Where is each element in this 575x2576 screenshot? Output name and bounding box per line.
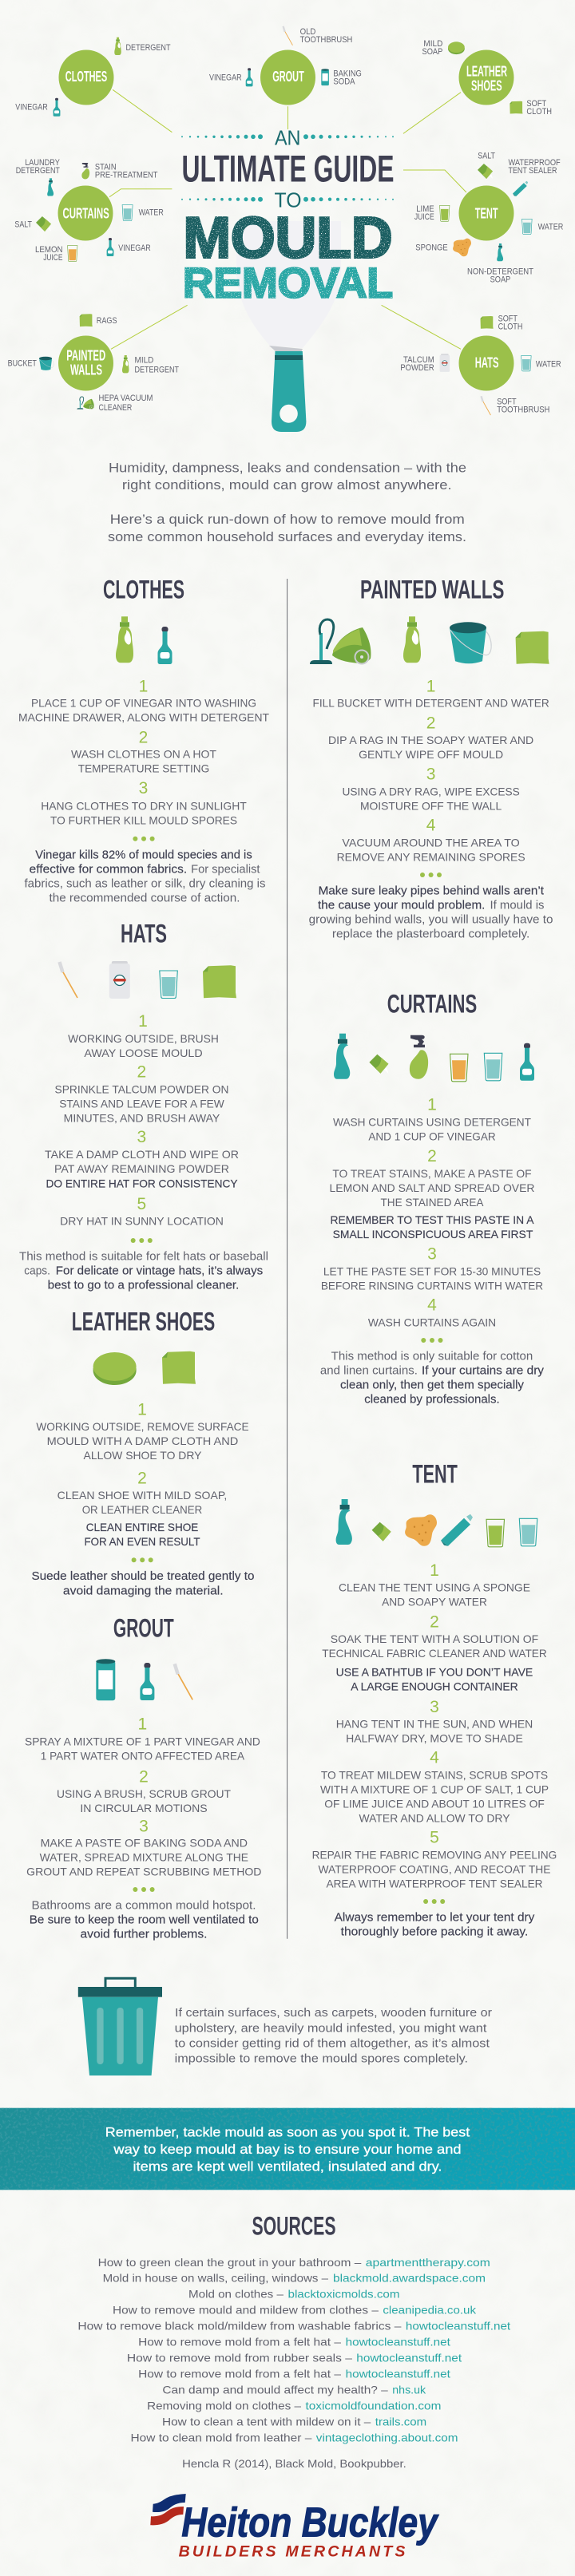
panel: painted walls: the cause your mould problem. (318, 900, 485, 912)
panel: tent: thoroughly before packing it away. (341, 1926, 528, 1939)
panel: clothes: TEMPERATURE SETTING (78, 762, 209, 775)
panel: grout: Bathrooms are a common mould hotspot. (32, 1900, 256, 1913)
panel: curtains: LET THE PASTE SET FOR 15-30 MINUTES (323, 1265, 541, 1278)
hub: curtains: LEMON (35, 245, 63, 255)
panel: tent: AND SOAPY WATER (382, 1596, 487, 1609)
panel: curtains: BEFORE RINSING CURTAINS WITH WATER (321, 1280, 543, 1292)
sources: howtocleanstuff.net (346, 2368, 450, 2380)
hub: leather shoes: SOAP (422, 47, 442, 57)
sources: howtocleanstuff.net (406, 2320, 510, 2333)
sources: howtocleanstuff.net (356, 2352, 462, 2364)
panel: clothes: 3 (139, 779, 148, 797)
panel: leather shoes: avoid damaging the material. (63, 1585, 224, 1597)
sources: Mold on clothes – (188, 2288, 284, 2301)
panel: curtains: This method is only suitable for cotton (331, 1351, 533, 1363)
panel: curtains: SMALL INCONSPICUOUS AREA FIRST (333, 1228, 533, 1241)
sources: cleanipedia.co.uk (383, 2304, 477, 2317)
panel: clothes: MACHINE DRAWER, ALONG WITH DETERGENT (18, 711, 269, 724)
panel: curtains: If your curtains are dry (422, 1365, 545, 1378)
panel: curtains: 1 (427, 1096, 437, 1114)
hub: leather shoes: LEATHER (466, 63, 507, 79)
panel: tent: WATER AND ALLOW TO DRY (359, 1811, 510, 1824)
sources: How to remove mold from a felt hat – (138, 2368, 341, 2380)
panel: grout: MAKE A PASTE OF BAKING SODA AND (41, 1837, 248, 1850)
hub: tent: JUICE (414, 212, 434, 222)
text: disposal advice: impossible to remove the mould spores completely. (175, 2052, 468, 2066)
panel: clothes: WASH CLOTHES ON A HOT (71, 748, 216, 761)
panel: leather shoes: 1 (137, 1400, 147, 1419)
panel: painted walls: replace the plasterboard completely. (332, 928, 529, 941)
sources: toxicmoldfoundation.com (305, 2400, 441, 2412)
panel: painted walls: REMOVE ANY REMAINING SPORES (337, 850, 525, 863)
panel: clothes: HANG CLOTHES TO DRY IN SUNLIGHT (41, 799, 247, 812)
hub: leather shoes: SHOES (471, 77, 502, 93)
panel: curtains: and linen curtains. (320, 1365, 418, 1378)
panel: tent: 1 (430, 1561, 439, 1580)
panel: leather shoes (32, 1308, 254, 1597)
panel: hats: 5 (137, 1195, 146, 1213)
panel: hats: DO ENTIRE HAT FOR CONSISTENCY (46, 1177, 238, 1190)
sources: How to clean mold from leather – (131, 2432, 312, 2444)
panel: tent: REPAIR THE FABRIC REMOVING ANY PEELING (312, 1848, 557, 1861)
hub: painted walls: RAGS (97, 316, 117, 326)
hub: painted walls: HEPA VACUUM (99, 394, 153, 403)
panel: tent: HALFWAY DRY, MOVE TO SHADE (346, 1732, 523, 1745)
hub: clothes: VINEGAR (15, 103, 48, 113)
sources: Hencla R (2014), Black Mold, Bookpubber. (182, 2457, 406, 2470)
hub: curtains: SALT (14, 220, 32, 230)
icon: rubbish bin (78, 1978, 162, 2075)
panel: painted walls: 4 (426, 817, 436, 835)
hub: curtains: DETERGENT (16, 166, 60, 176)
logo: Heiton Buckley: Heiton Buckley (181, 2499, 439, 2546)
panel: hats: AWAY LOOSE MOULD (84, 1047, 203, 1059)
main title: TO (275, 188, 302, 212)
panel: painted walls: 2 (426, 714, 435, 733)
panel: grout: 1 (137, 1715, 147, 1734)
panel: tent: WITH A MIXTURE OF 1 CUP OF SALT, 1 CUP (320, 1783, 549, 1795)
panel: painted walls: 3 (426, 766, 435, 784)
panel: leather shoes: ALLOW SHOE TO DRY (84, 1449, 202, 1462)
panel: clothes: Vinegar kills 82% of mould species and is (35, 849, 252, 861)
panel: clothes: effective for common fabrics. (30, 863, 187, 876)
sources: How to remove black mold/mildew from washable fabrics – (77, 2320, 402, 2333)
main title (181, 128, 395, 307)
panel: tent: 2 (430, 1613, 439, 1632)
panel: tent: CLEAN THE TENT USING A SPONGE (339, 1581, 530, 1593)
panel: painted walls: growing behind walls, you will usually have to (309, 914, 553, 927)
hub: hats: WATER (536, 359, 561, 369)
sources: vintageclothing.about.com (316, 2432, 458, 2444)
panel: curtains (320, 990, 545, 1407)
panel: clothes: 1 (139, 678, 148, 696)
hub: grout: OLD (300, 27, 315, 37)
panel: tent: 5 (430, 1829, 439, 1847)
scraper illustration (236, 221, 341, 432)
panel: curtains: TO TREAT STAINS, MAKE A PASTE OF (332, 1167, 532, 1180)
hub: tent: NON-DETERGENT (467, 267, 533, 276)
hub: hats: HATS (475, 354, 498, 370)
panel: curtains: 4 (427, 1296, 437, 1315)
intro text (108, 461, 466, 544)
panel: tent: WATERPROOF COATING, AND RECOAT THE (318, 1862, 551, 1875)
hub: curtains: CURTAINS (62, 205, 109, 221)
panel: curtains: CURTAINS (387, 990, 477, 1019)
hub: grout: GROUT (272, 69, 304, 85)
panel: tent: SOAK THE TENT WITH A SOLUTION OF (331, 1632, 538, 1645)
sources: apartmenttherapy.com (366, 2256, 490, 2269)
panel: curtains: clean only, then get them specially (340, 1379, 525, 1392)
intro text: Here’s a quick run-down of how to remove mould from (110, 512, 465, 527)
hub: grout (209, 26, 362, 105)
panel: hats: TAKE A DAMP CLOTH AND WIPE OR (45, 1148, 239, 1161)
panel: grout (25, 1613, 261, 1941)
text: disposal advice: If certain surfaces, such as carpets, wooden furniture or (175, 2006, 492, 2020)
hub: hats: POWDER (400, 363, 434, 373)
panel: painted walls: PAINTED WALLS (360, 575, 504, 603)
logo: Heiton Buckley (150, 2494, 439, 2560)
panel: curtains: cleaned by professionals. (364, 1394, 500, 1407)
panel: painted walls (309, 575, 553, 941)
panel: grout: USING A BRUSH, SCRUB GROUT (57, 1787, 231, 1800)
sources: How to clean a tent with mildew on it – (162, 2416, 371, 2428)
panel: leather shoes: WORKING OUTSIDE, REMOVE SURFACE (36, 1420, 249, 1433)
panel: painted walls: If mould is (490, 900, 545, 912)
sources: SOURCES (252, 2211, 335, 2240)
sources: How to remove mold from a felt hat – (138, 2336, 341, 2348)
hub: tent: WATERPROOF (508, 158, 561, 168)
hub: tent: SPONGE (415, 243, 448, 252)
panel: clothes: PLACE 1 CUP OF VINEGAR INTO WASHING (31, 697, 256, 710)
intro text: right conditions, mould can grow almost anywhere. (122, 478, 452, 493)
panel: hats: HATS (121, 920, 167, 948)
panel: hats: SPRINKLE TALCUM POWDER ON (54, 1083, 228, 1096)
hub: curtains: WATER (139, 208, 164, 217)
panel: tent: TO TREAT MILDEW STAINS, SCRUB SPOTS (321, 1768, 548, 1781)
panel: tent: 4 (430, 1749, 439, 1767)
hub: leather shoes: SOFT (526, 99, 546, 109)
sources: howtocleanstuff.net (346, 2336, 450, 2348)
hub: hats (400, 314, 561, 415)
main title: AN (275, 128, 300, 150)
sources: trails.com (375, 2416, 426, 2428)
panel: hats: 2 (137, 1063, 146, 1082)
hub: tent: WATER (538, 222, 563, 231)
hub: clothes: DETERGENT (126, 43, 171, 53)
panel: tent: TECHNICAL FABRIC CLEANER AND WATER (322, 1647, 547, 1660)
banner: Remember, tackle mould as soon as you spot it. The best (105, 2125, 470, 2139)
panel: leather shoes: 2 (137, 1469, 147, 1487)
panel: tent: 3 (430, 1698, 439, 1716)
hub: hats: CLOTH (498, 322, 522, 331)
hub: painted walls: MILD (134, 356, 153, 366)
panel: tent: TENT (412, 1460, 458, 1489)
panel: tent (312, 1460, 557, 1939)
hub: leather shoes: MILD (423, 39, 442, 49)
panel: leather shoes: CLEAN SHOE WITH MILD SOAP, (58, 1489, 227, 1502)
panel: curtains: 3 (427, 1245, 437, 1264)
column divider (287, 579, 288, 1939)
sources: nhs.uk (392, 2384, 426, 2396)
panel: hats: DRY HAT IN SUNNY LOCATION (60, 1215, 224, 1228)
panel: painted walls: DIP A RAG IN THE SOAPY WATER AND (328, 734, 533, 746)
panel: leather shoes: MOULD WITH A DAMP CLOTH AND (47, 1434, 238, 1447)
panel: hats: WORKING OUTSIDE, BRUSH (68, 1032, 219, 1045)
panel: curtains: AND 1 CUP OF VINEGAR (368, 1130, 496, 1143)
panel: clothes: the recommended course of action. (50, 892, 240, 904)
main title: ULTIMATE GUIDE (182, 147, 395, 189)
hub: grout: SODA (333, 77, 355, 87)
hub: leather shoes (422, 39, 552, 117)
hub: tent (414, 152, 563, 284)
text: disposal advice (175, 2006, 492, 2066)
sources: How to remove mold from rubber seals – (127, 2352, 352, 2364)
panel: curtains: WASH CURTAINS AGAIN (368, 1316, 496, 1328)
hub: curtains: LAUNDRY (25, 158, 60, 168)
panel: grout: 2 (139, 1767, 149, 1786)
panel: curtains: REMEMBER TO TEST THIS PASTE IN A (331, 1213, 534, 1226)
panel: painted walls: 1 (426, 678, 435, 696)
sources: Removing mold on clothes – (147, 2400, 301, 2412)
panel: grout: GROUT AND REPEAT SCRUBBING METHOD (26, 1866, 261, 1878)
hub: grout: BAKING (333, 69, 362, 79)
hub: painted walls (8, 314, 179, 413)
hub: grout: VINEGAR (209, 73, 242, 83)
hub: curtains: JUICE (43, 253, 62, 263)
panel: curtains: WASH CURTAINS USING DETERGENT (333, 1116, 531, 1129)
panel: painted walls: GENTLY WIPE OFF MOULD (359, 748, 503, 761)
sources: Mold in house on walls, ceiling, windows – (103, 2271, 328, 2284)
panel: leather shoes: CLEAN ENTIRE SHOE (86, 1521, 198, 1533)
intro text: some common household surfaces and everyday items. (108, 530, 466, 544)
panel: clothes: For specialist (191, 863, 260, 876)
panel: hats: PAT AWAY REMAINING POWDER (54, 1162, 229, 1175)
panel: hats: 1 (138, 1012, 148, 1031)
hub: painted walls: PAINTED (66, 347, 105, 363)
panel: hats: 3 (137, 1128, 146, 1146)
panel: grout: IN CIRCULAR MOTIONS (80, 1802, 208, 1814)
panel: curtains: LEMON AND SALT AND SPREAD OVER (329, 1181, 535, 1194)
panel: hats: best to go to a professional cleaner. (48, 1280, 239, 1292)
panel: curtains: THE STAINED AREA (380, 1196, 484, 1209)
hub: hats: SOFT (497, 398, 517, 407)
panel: clothes: 2 (139, 729, 148, 747)
sources: Can damp and mould affect my health? – (162, 2384, 388, 2396)
panel: leather shoes: Suede leather should be treated gently to (32, 1570, 254, 1583)
panel: grout: 1 PART WATER ONTO AFFECTED AREA (41, 1750, 245, 1763)
panel: painted walls: VACUUM AROUND THE AREA TO (342, 836, 520, 849)
hub: curtains: STAIN (95, 163, 117, 172)
panel: clothes (18, 575, 269, 904)
panel: leather shoes: LEATHER SHOES (72, 1308, 215, 1336)
panel: painted walls: Make sure leaky pipes behind walls aren’t (319, 885, 544, 898)
hub: curtains: VINEGAR (118, 243, 151, 253)
sources: blackmold.awardspace.com (333, 2271, 486, 2284)
hub: painted walls: DETERGENT (134, 366, 179, 375)
hub: tent: TENT SEALER (508, 166, 557, 176)
panel: clothes: TO FURTHER KILL MOULD SPORES (50, 813, 237, 826)
sources: How to remove mould and mildew from clothes – (113, 2304, 379, 2317)
hub: painted walls: CLEANER (99, 403, 132, 413)
hub: curtains (14, 158, 164, 263)
text: disposal advice: upholstery, are heavily mould infested, you might want (175, 2021, 487, 2035)
hub: clothes (15, 38, 171, 117)
panel: tent: A LARGE ENOUGH CONTAINER (351, 1680, 518, 1693)
hub: tent: LIME (416, 204, 434, 214)
text: disposal advice: to consider getting rid of them altogether, as it’s almost (175, 2036, 490, 2050)
hub: painted walls: BUCKET (8, 358, 37, 368)
main title: MOULD (184, 206, 393, 270)
panel: tent: HANG TENT IN THE SUN, AND WHEN (336, 1718, 533, 1731)
panel: leather shoes: OR LEATHER CLEANER (82, 1503, 202, 1516)
hub: hats: TOOTHBRUSH (497, 406, 549, 415)
panel: tent: OF LIME JUICE AND ABOUT 10 LITRES OF (324, 1797, 545, 1810)
hub: leather shoes: CLOTH (526, 107, 552, 117)
panel: curtains: 2 (427, 1147, 437, 1165)
panel: hats: STAINS AND LEAVE FOR A FEW (59, 1098, 225, 1110)
panel: grout: 3 (139, 1817, 149, 1835)
hub: painted walls: WALLS (70, 362, 102, 378)
connector lines (109, 89, 466, 349)
panel: grout: Be sure to keep the room well ventilated to (30, 1914, 259, 1927)
banner: items are kept well ventilated, insulated and dry. (133, 2160, 442, 2174)
panel: hats: caps. (24, 1265, 50, 1278)
panel: tent: USE A BATHTUB IF YOU DON’T HAVE (336, 1666, 533, 1679)
banner (0, 2108, 575, 2190)
hub: tent: SALT (478, 152, 495, 161)
panel: hats: This method is suitable for felt hats or baseball (19, 1251, 268, 1264)
panel: grout: WATER, SPREAD MIXTURE ALONG THE (40, 1851, 248, 1864)
banner: way to keep mould at bay is to ensure your home and (113, 2143, 462, 2157)
hub: curtains: PRE-TREATMENT (95, 171, 158, 180)
main title: REMOVAL (183, 260, 393, 307)
intro text: Humidity, dampness, leaks and condensation – with the (109, 461, 466, 475)
panel: clothes: fabrics, such as leather or silk, dry cleaning is (24, 877, 265, 890)
panel: leather shoes: FOR AN EVEN RESULT (85, 1535, 200, 1548)
hub: hats: TALCUM (403, 355, 434, 365)
panel: tent: AREA WITH WATERPROOF TENT SEALER (326, 1877, 543, 1889)
sources: blacktoxicmolds.com (288, 2288, 399, 2301)
hub: clothes: CLOTHES (65, 69, 107, 85)
panel: grout: SPRAY A MIXTURE OF 1 PART VINEGAR AND (25, 1735, 260, 1748)
hub: tent: TENT (475, 205, 498, 221)
logo: Heiton Buckley: BUILDERS MERCHANTS (179, 2542, 405, 2560)
panel: painted walls: MOISTURE OFF THE WALL (360, 800, 502, 813)
panel: painted walls: FILL BUCKET WITH DETERGENT AND WATER (313, 697, 549, 710)
hub: tent: SOAP (490, 275, 510, 284)
panel: hats: For delicate or vintage hats, it’s always (56, 1265, 263, 1278)
sources (77, 2211, 510, 2470)
hub: grout: TOOTHBRUSH (300, 35, 352, 45)
panel: grout: avoid further problems. (81, 1929, 207, 1941)
panel: painted walls: USING A DRY RAG, WIPE EXCESS (342, 785, 520, 798)
sources: How to green clean the grout in your bathroom – (98, 2256, 362, 2269)
panel: clothes: CLOTHES (103, 575, 184, 603)
panel: hats: MINUTES, AND BRUSH AWAY (64, 1112, 220, 1125)
panel: hats (19, 920, 268, 1292)
hub: hats: SOFT (498, 314, 518, 323)
panel: grout: GROUT (113, 1613, 174, 1642)
panel: tent: Always remember to let your tent dry (335, 1912, 535, 1925)
